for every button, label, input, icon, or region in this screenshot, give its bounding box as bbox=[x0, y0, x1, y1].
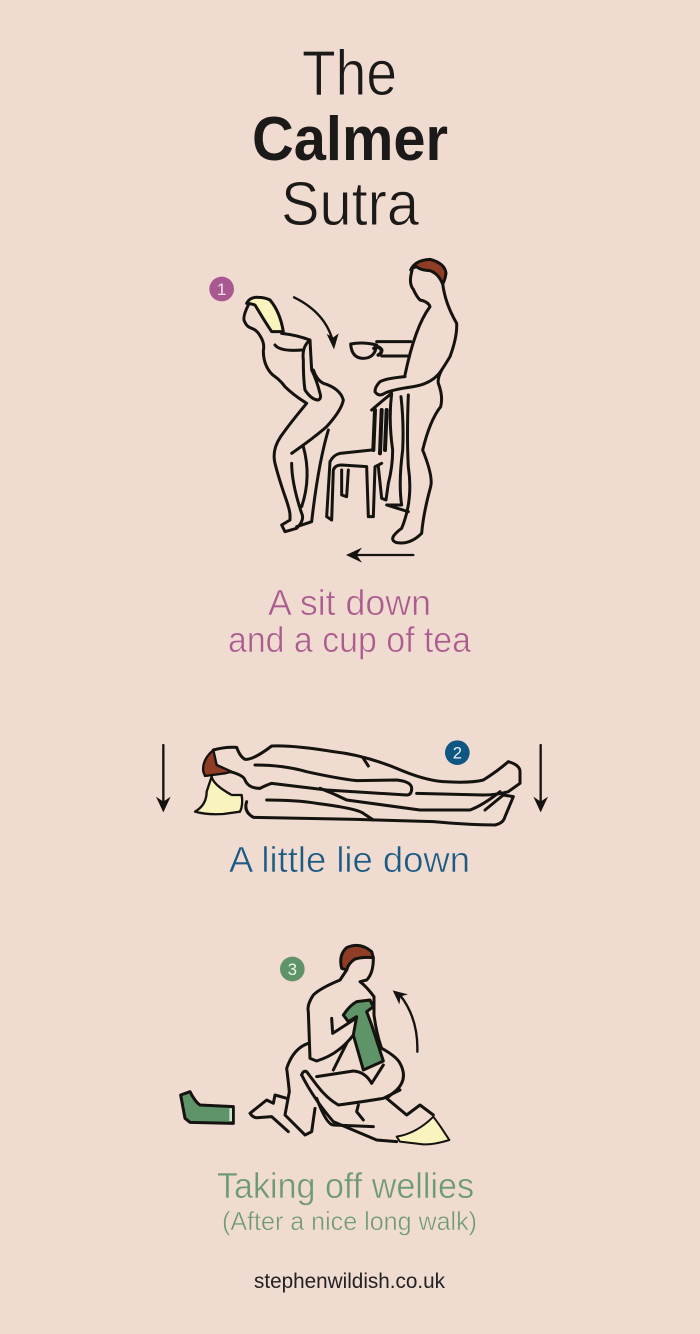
badge 1 bbox=[209, 277, 234, 301]
badge 3: 3 bbox=[288, 960, 297, 979]
arrow: curved down bbox=[294, 297, 339, 349]
caption 3 bbox=[217, 1165, 477, 1236]
caption 2: A little lie down bbox=[229, 839, 470, 880]
caption 1 bbox=[228, 582, 472, 660]
title: The bbox=[302, 37, 397, 109]
caption 1: and a cup of tea bbox=[228, 619, 472, 660]
welly on ground bbox=[181, 1092, 233, 1123]
woman figure bbox=[244, 297, 343, 532]
man figure with cup bbox=[351, 259, 457, 543]
illustration 3: taking off wellies bbox=[181, 945, 449, 1144]
badge 2: 2 bbox=[453, 744, 462, 763]
badge 2 bbox=[445, 740, 470, 765]
arrow: left bbox=[346, 548, 413, 563]
caption 3: (After a nice long walk) bbox=[222, 1206, 477, 1236]
title bbox=[252, 37, 448, 239]
chair bbox=[327, 393, 393, 520]
arrow: left down bbox=[156, 745, 171, 812]
arrow: curved up bbox=[393, 990, 417, 1052]
illustration 2: a little lie down bbox=[156, 740, 548, 825]
caption 3: Taking off wellies bbox=[217, 1165, 474, 1206]
credit: stephenwildish.co.uk bbox=[254, 1270, 445, 1293]
welly held up bbox=[343, 1000, 383, 1070]
illustration 1: sit down and a cup of tea bbox=[209, 259, 457, 563]
arrow: right down bbox=[533, 745, 548, 812]
lying couple bbox=[195, 746, 520, 825]
badge 3 bbox=[280, 957, 305, 981]
caption 1: A sit down bbox=[268, 582, 431, 623]
title: Calmer bbox=[252, 105, 448, 174]
badge 1: 1 bbox=[217, 280, 226, 299]
kneeling couple bbox=[250, 945, 449, 1144]
title: Sutra bbox=[281, 170, 419, 239]
